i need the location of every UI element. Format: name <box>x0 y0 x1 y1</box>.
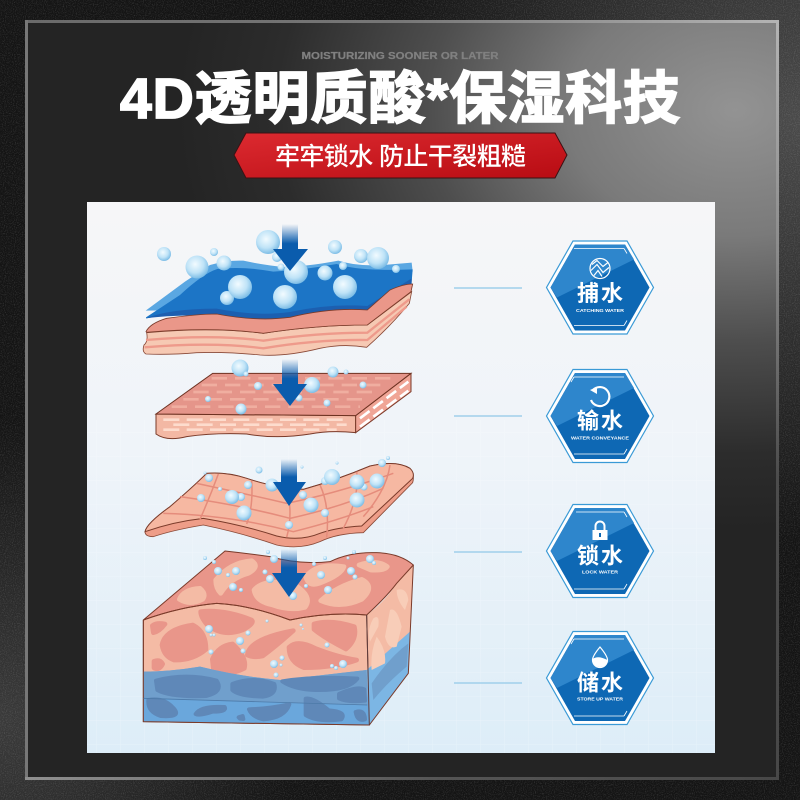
title: 4D透明质酸*保湿科技 <box>120 67 680 131</box>
skin layer 3: wavy grid sheet <box>145 463 413 547</box>
badge: water conveyance: WATER CONVEYANCE <box>571 436 629 440</box>
skin layer 2: epidermis block <box>156 373 411 439</box>
ribbon text: 牢牢锁水 防止干裂粗糙 <box>275 143 526 171</box>
icon: water drop <box>592 647 608 668</box>
badge: catching water: 捕水 <box>577 281 623 306</box>
badge: store up water: STORE UP WATER <box>577 696 624 702</box>
badge: lock water <box>546 504 654 598</box>
badge: lock water: LOCK WATER <box>582 570 619 574</box>
connector lines <box>454 288 522 683</box>
badge: store up water: 储水 <box>577 670 623 696</box>
skin layer 1: water film on skin <box>143 261 413 355</box>
panel: skin layers illustration <box>87 202 715 753</box>
skin layer 4: dermis block with water <box>143 551 413 725</box>
badge: water conveyance <box>546 370 654 462</box>
subtitle: MOISTURIZING SOONER OR LATER <box>302 50 499 62</box>
arrow: down into layer 1 <box>273 224 308 271</box>
arrow: down into layer 4 <box>272 549 306 597</box>
badge: water conveyance: 输水 <box>577 408 623 434</box>
water bubbles <box>157 230 400 678</box>
icon: globe with water <box>590 258 610 278</box>
badge: store up water <box>546 632 654 724</box>
red ribbon banner <box>234 133 567 178</box>
badge: catching water: CATCHING WATER <box>576 308 625 313</box>
badge: lock water: 锁水 <box>577 544 623 568</box>
arrow: down into layer 3 <box>273 459 306 506</box>
icon: padlock <box>592 522 608 540</box>
arrow: down into layer 2 <box>273 359 307 406</box>
badge: catching water <box>546 241 654 334</box>
icon: circular arrow <box>590 387 609 406</box>
